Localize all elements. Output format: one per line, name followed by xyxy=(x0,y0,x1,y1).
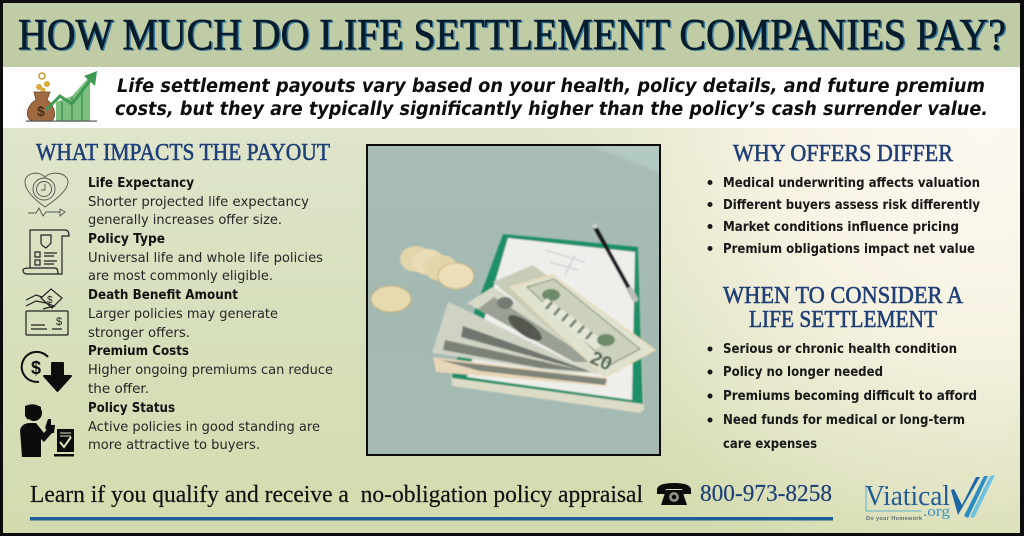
intro text: costs, but they are typically significantly higher than the policy’s cash surrender value. xyxy=(115,99,988,120)
item: premium costs: the offer. xyxy=(88,382,149,397)
item: life expectancy xyxy=(88,176,309,228)
icon: dollar with down arrow: $ xyxy=(31,358,41,378)
item: premium costs: Higher ongoing premiums can reduce xyxy=(88,363,333,378)
intro text: Life settlement payouts vary based on your health, policy details, and future premium xyxy=(117,76,985,97)
icon: telephone xyxy=(657,483,691,505)
bullet list: why offers differ: Market conditions influence pricing xyxy=(723,220,959,235)
logo: viatical.org: Do your Homework xyxy=(866,516,923,522)
item: premium costs xyxy=(88,344,333,397)
icon: money bag and rising chart: $ xyxy=(37,103,45,119)
item: policy status: more attractive to buyers. xyxy=(88,438,260,453)
pen xyxy=(595,227,630,290)
item: death benefit amount: Death Benefit Amount xyxy=(88,288,238,303)
item: policy type xyxy=(88,232,323,284)
icon: hand with cash and check: $ xyxy=(47,295,53,306)
photo: cash, coins, notebook and pen: 20 xyxy=(587,348,615,375)
icon: hand with cash and check: $ xyxy=(56,316,62,328)
logo: viatical.org: Viatical xyxy=(865,481,950,512)
bullet list: when to consider: Need funds for medical or long-term xyxy=(723,413,965,428)
icon: policy document xyxy=(23,230,69,274)
logo: viatical.org: .org xyxy=(923,504,951,520)
heading: when to consider a life settlement: LIFE SETTLEMENT xyxy=(749,307,937,333)
bullet list: when to consider: Policy no longer needed xyxy=(723,365,883,380)
heading: why offers differ: WHY OFFERS DIFFER xyxy=(733,141,953,167)
call to action text: Learn if you qualify and receive a no-obligation policy appraisal xyxy=(30,481,643,508)
item: policy status xyxy=(88,401,320,453)
item: death benefit amount: stronger offers. xyxy=(88,326,190,341)
bullet list: when to consider: Premiums becoming difficult to afford xyxy=(723,389,977,404)
panel: what impacts the payout xyxy=(20,140,333,457)
bullet list: why offers differ: Medical underwriting affects valuation xyxy=(723,176,980,191)
item: life expectancy: generally increases offer size. xyxy=(88,213,282,228)
item: life expectancy: Shorter projected life expectancy xyxy=(88,195,309,210)
coins xyxy=(400,245,426,273)
item: policy type: Policy Type xyxy=(88,232,165,247)
intro text xyxy=(115,76,988,120)
call to action xyxy=(30,481,833,520)
item: premium costs: Premium Costs xyxy=(88,344,189,359)
title band xyxy=(3,3,1020,67)
heading: when to consider a life settlement: WHEN TO CONSIDER A xyxy=(723,283,964,309)
intro band xyxy=(3,67,1020,128)
item: policy status: Policy Status xyxy=(88,401,175,416)
icon: money bag and rising chart xyxy=(26,71,97,122)
item: policy status: Active policies in good standing are xyxy=(88,420,320,435)
phone number: 800-973-8258 xyxy=(700,481,832,507)
bullet list: when to consider: Serious or chronic health condition xyxy=(723,342,957,357)
icon: hand with cash and check xyxy=(26,289,68,335)
photo: cash, coins, notebook and pen xyxy=(367,145,660,455)
panel: when to consider a life settlement xyxy=(708,283,977,452)
heading: what impacts the payout: WHAT IMPACTS THE PAYOUT xyxy=(36,140,330,166)
item: life expectancy: Life Expectancy xyxy=(88,176,194,191)
icon: heart with clock xyxy=(25,173,68,216)
panel: why offers differ xyxy=(708,141,980,257)
bullet list: why offers differ xyxy=(708,176,980,257)
item: policy type: are most commonly eligible. xyxy=(88,269,273,284)
logo: viatical.org xyxy=(865,475,995,522)
icon: businessman with approved document xyxy=(20,404,74,457)
bills xyxy=(433,357,607,386)
bullet list: why offers differ: Premium obligations impact net value xyxy=(723,242,975,257)
bullet list: when to consider: care expenses xyxy=(723,437,817,452)
divider line xyxy=(30,517,833,520)
heading: when to consider a life settlement xyxy=(723,283,964,333)
item: policy type: Universal life and whole life policies xyxy=(88,251,323,266)
notebook xyxy=(451,234,644,413)
bullet list: why offers differ: Different buyers assess risk differently xyxy=(723,198,980,213)
icon: dollar with down arrow xyxy=(22,352,71,391)
item: death benefit amount xyxy=(88,288,278,341)
item: death benefit amount: Larger policies may generate xyxy=(88,307,278,322)
bullet list: when to consider xyxy=(708,342,977,452)
